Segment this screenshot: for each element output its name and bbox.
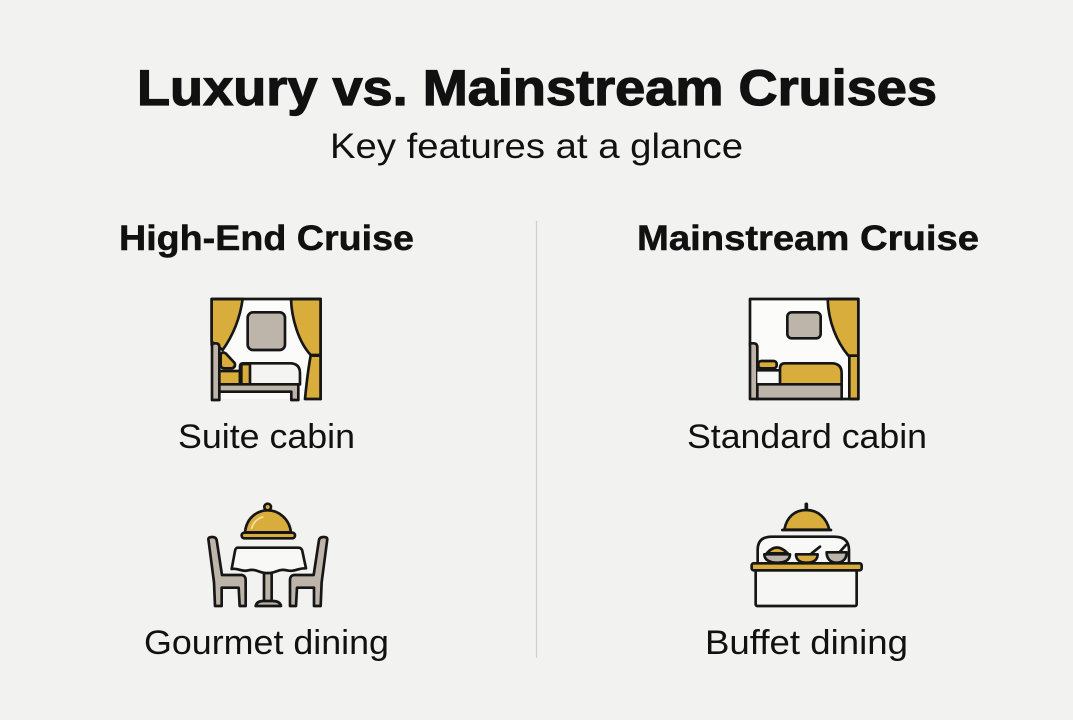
icon part: right chair xyxy=(290,537,327,606)
icon: gourmet dining xyxy=(208,504,327,606)
heading: high-end cruise: High-End Cruise xyxy=(119,219,414,258)
icon part: counter xyxy=(752,563,862,606)
icon: buffet dining xyxy=(752,504,862,606)
icon: suite cabin xyxy=(212,299,321,400)
panel: mainstream cruise xyxy=(637,219,979,662)
title: Luxury vs. Mainstream Cruises xyxy=(137,60,937,116)
icon: standard cabin xyxy=(750,299,858,399)
icon part: cloche xyxy=(782,504,831,530)
label: buffet dining: Buffet dining xyxy=(705,624,908,662)
icon part: cloche xyxy=(242,504,295,538)
icon part: bowls xyxy=(764,545,847,563)
label: gourmet dining: Gourmet dining xyxy=(144,624,389,662)
subtitle: Key features at a glance xyxy=(330,127,743,166)
icon part: table xyxy=(232,548,306,606)
heading: mainstream cruise: Mainstream Cruise xyxy=(637,219,979,258)
icon part: left chair xyxy=(208,537,246,606)
icon part: sneeze guard xyxy=(758,537,849,563)
label: suite cabin: Suite cabin xyxy=(178,418,355,456)
panel: high-end cruise xyxy=(119,219,414,662)
label: standard cabin: Standard cabin xyxy=(687,418,927,456)
